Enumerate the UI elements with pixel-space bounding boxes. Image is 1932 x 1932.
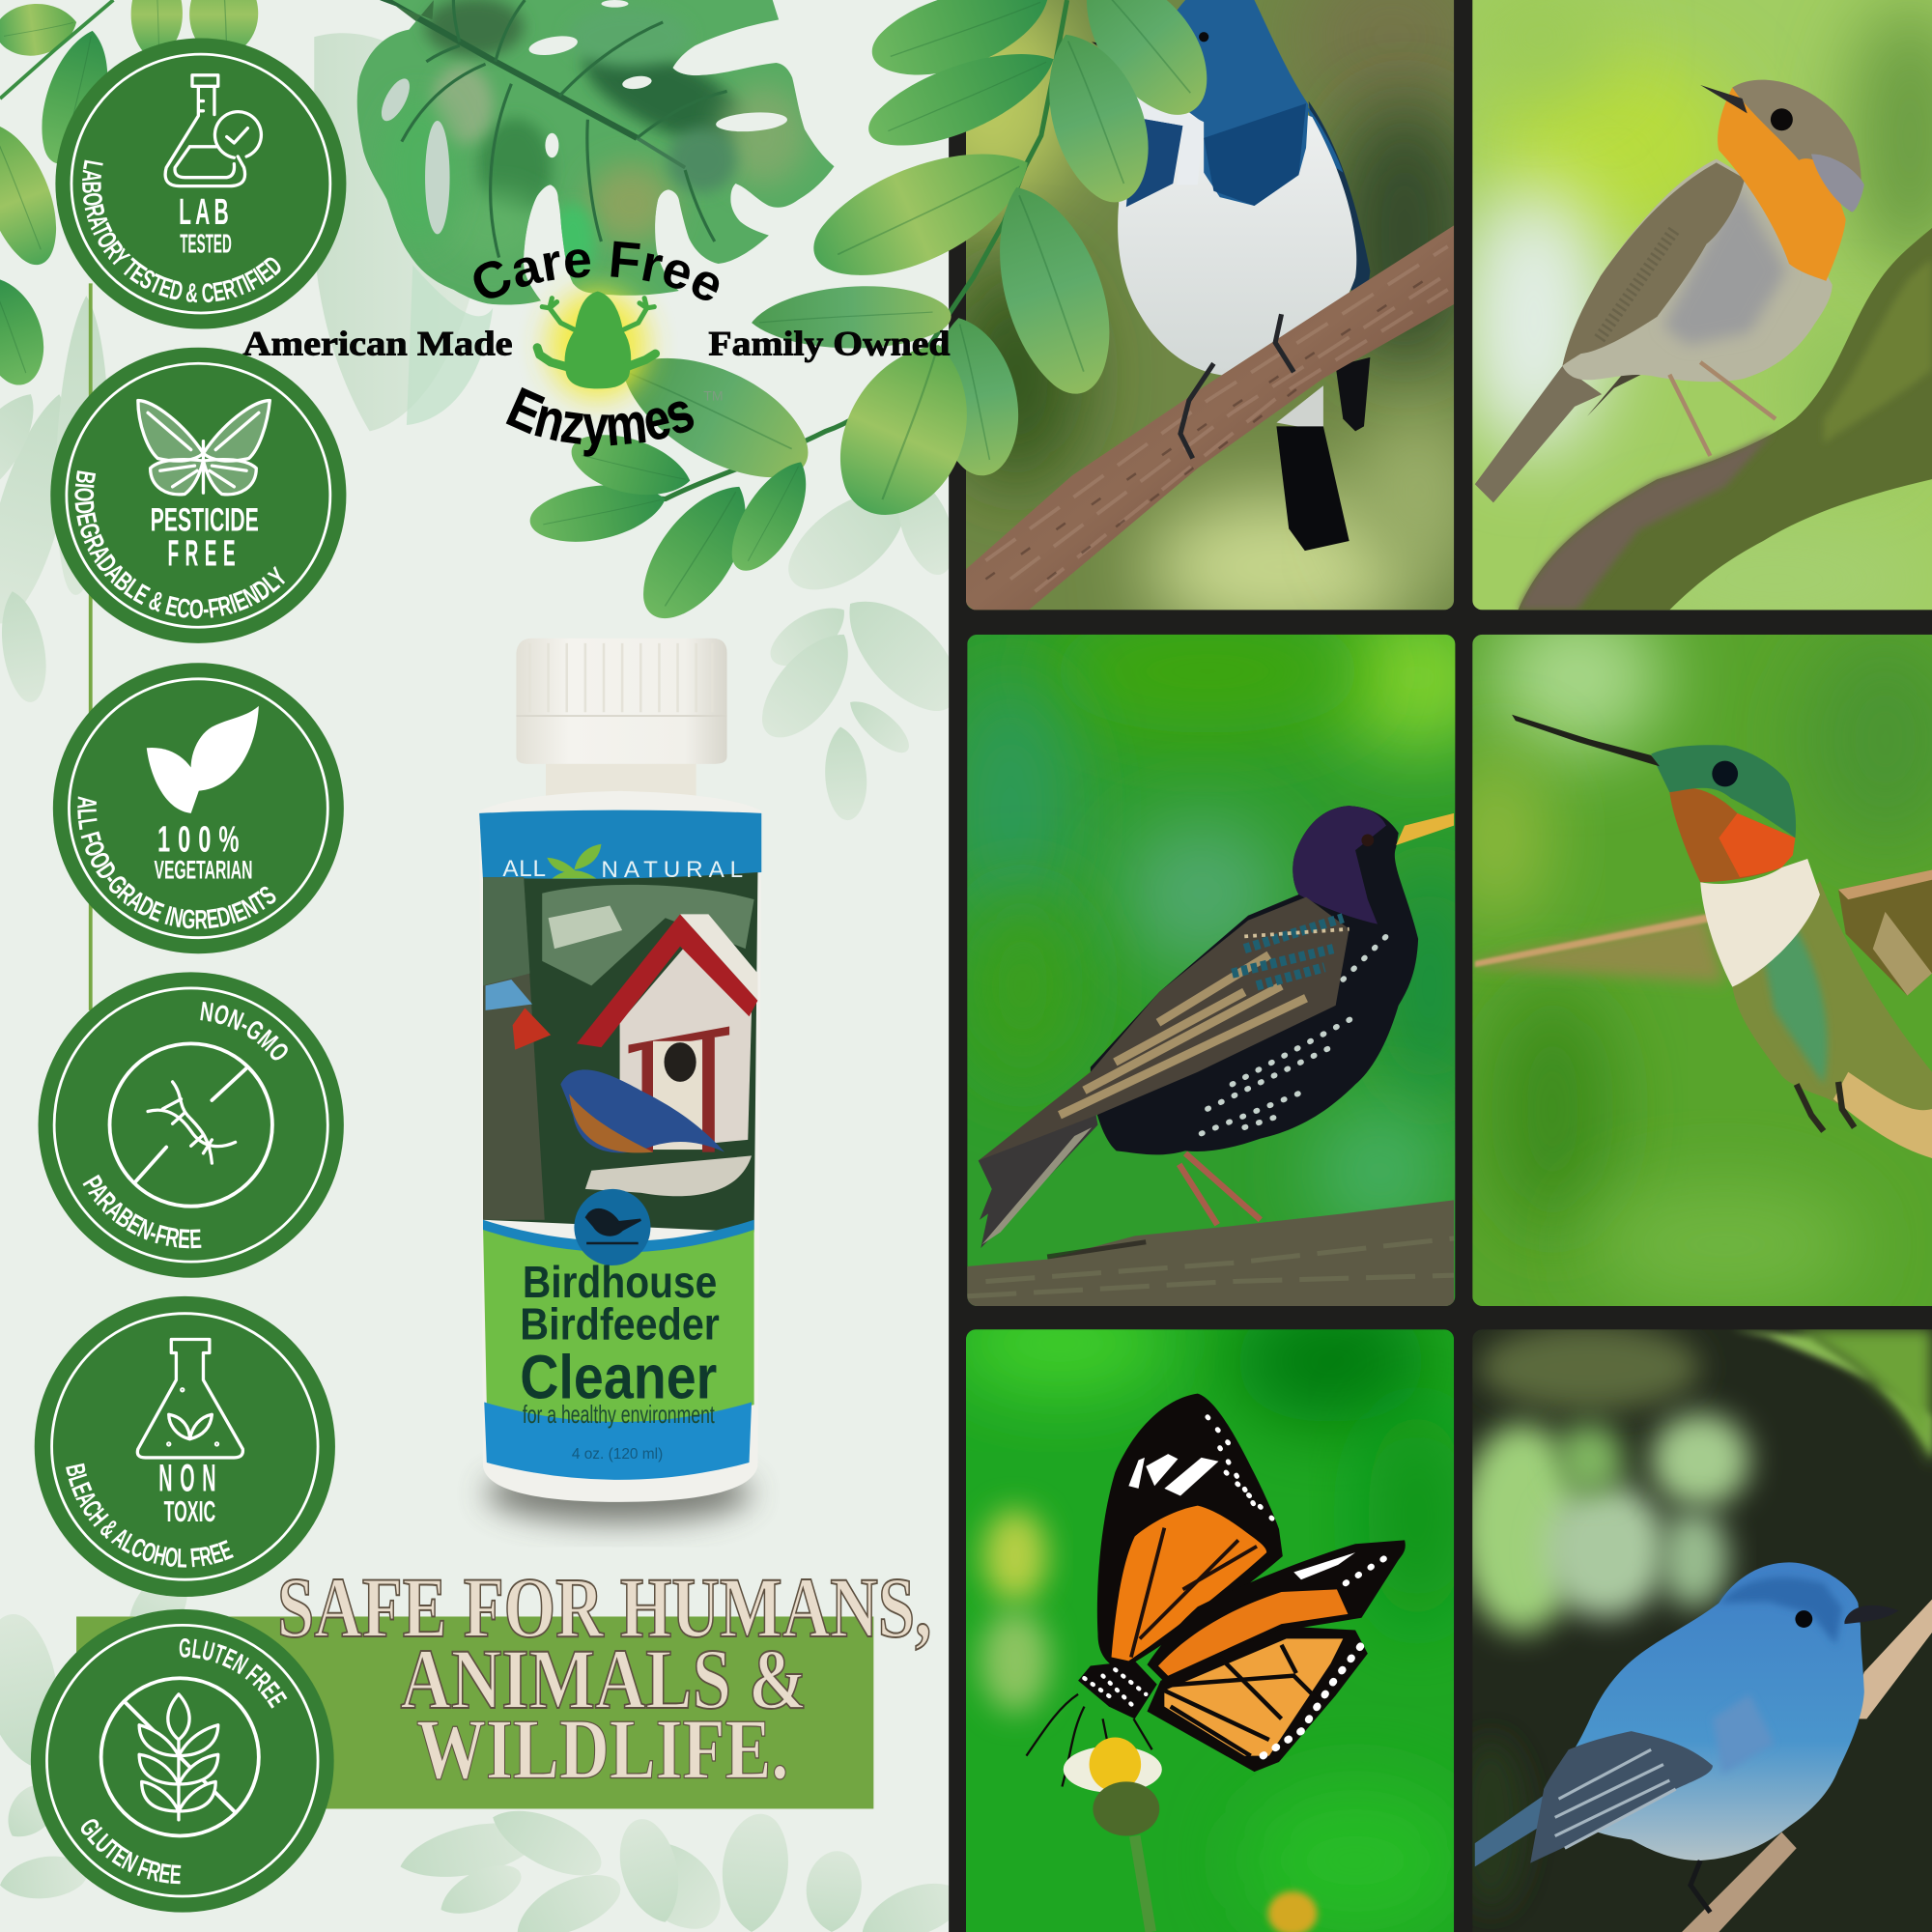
product bottle [479,639,761,1523]
top blue band [479,810,761,880]
vertical green line [89,283,93,1010]
cap [516,639,727,764]
product bottle: Cleaner [520,1343,717,1412]
badge: non-GMO [39,972,344,1278]
label text: volume: 4 oz. (120 ml) [572,1446,663,1463]
badge: lab tested [55,39,346,329]
label scene [483,872,757,1233]
left corner leaves [0,0,258,393]
photo: blue bird with dark bokeh background [1454,1324,1932,1932]
badge title: 100% [157,818,246,860]
photo: hummingbird hovering [1448,604,1932,1306]
curved caption: BLEACH & ALCOHOL FREE [60,1462,237,1574]
birdhouse [620,945,752,1152]
label text: tagline: for a healthy environment [523,1402,715,1429]
trademark: TM [703,388,724,404]
headline [277,1560,931,1798]
bird emblem [574,1189,650,1265]
frog icon [537,292,656,388]
icon: flask with leaf [137,1339,242,1458]
lower blue band [484,1403,752,1480]
badge: pesticide free [50,348,346,643]
tagline: American Made: American Made [242,324,513,362]
icon: wheat crossed out [126,1694,234,1820]
bluebird on label [560,1069,724,1152]
sprout icon [547,844,601,878]
badge: non toxic: TOXIC [164,1495,215,1528]
neck [546,764,696,796]
top caption: NON-GMO [198,996,295,1067]
green label panel [483,1225,754,1423]
badge: 100% vegetarian: VEGETARIAN [154,855,252,884]
bottom caption: GLUTEN FREE [73,1813,183,1889]
frog glow [549,291,647,399]
badge title: NON [158,1457,223,1499]
headline: SAFE FOR HUMANS, [277,1560,931,1656]
Care Free wordmark: Care Free [473,242,719,300]
badge: non toxic [35,1296,335,1597]
photo: tiger butterfly on flower [966,1329,1455,1932]
curved caption: BIODEGRADABLE & ECO-FRIENDLY [74,470,286,618]
bottom caption: PARABEN-FREE [77,1171,202,1254]
headline: WILDLIFE. [416,1702,788,1798]
top caption: GLUTEN FREE [179,1633,293,1712]
green banner [76,1616,873,1808]
product bottle: Birdfeeder [520,1298,720,1349]
badge title: LAB [179,190,233,233]
tagline: Family Owned: Family Owned [708,324,951,362]
icon: flask with check [165,75,261,186]
curved caption: LABORATORY TESTED & CERTIFIED [82,160,280,303]
badge: 100% vegetarian [53,663,344,953]
badge title: PESTICIDE [151,502,259,539]
badge: lab tested: TESTED [180,228,232,258]
bottle body [479,791,761,1502]
headline: ANIMALS & [401,1632,807,1727]
dark frame behind photos [949,0,1932,1932]
badge: gluten free [31,1609,334,1913]
bottle shadow [486,1463,752,1523]
feeder ledge [585,1155,752,1196]
logo: Care Free Enzymes [463,231,732,458]
Enzymes wordmark: Enzymes [506,386,694,457]
product bottle: NATURAL [601,857,743,883]
badge: pesticide free: FREE [167,534,242,574]
icon: leaves [147,706,259,813]
faint background foliage [0,33,978,1932]
label text: All Natural: ALL [502,856,546,882]
icon: butterfly [138,401,270,495]
right hanging leaf branch [526,0,1233,637]
icon: DNA crossed out [135,1068,246,1181]
curved caption: ALL FOOD-GRADE INGREDIENTS [71,796,282,935]
photo: blue and white flycatcher on branch [966,0,1455,611]
photo: starling on log [967,634,1455,1306]
monstera leaf [345,0,850,314]
label text: product name: Birdhouse [523,1257,717,1307]
photo: robin on mossy branch [1460,0,1932,640]
